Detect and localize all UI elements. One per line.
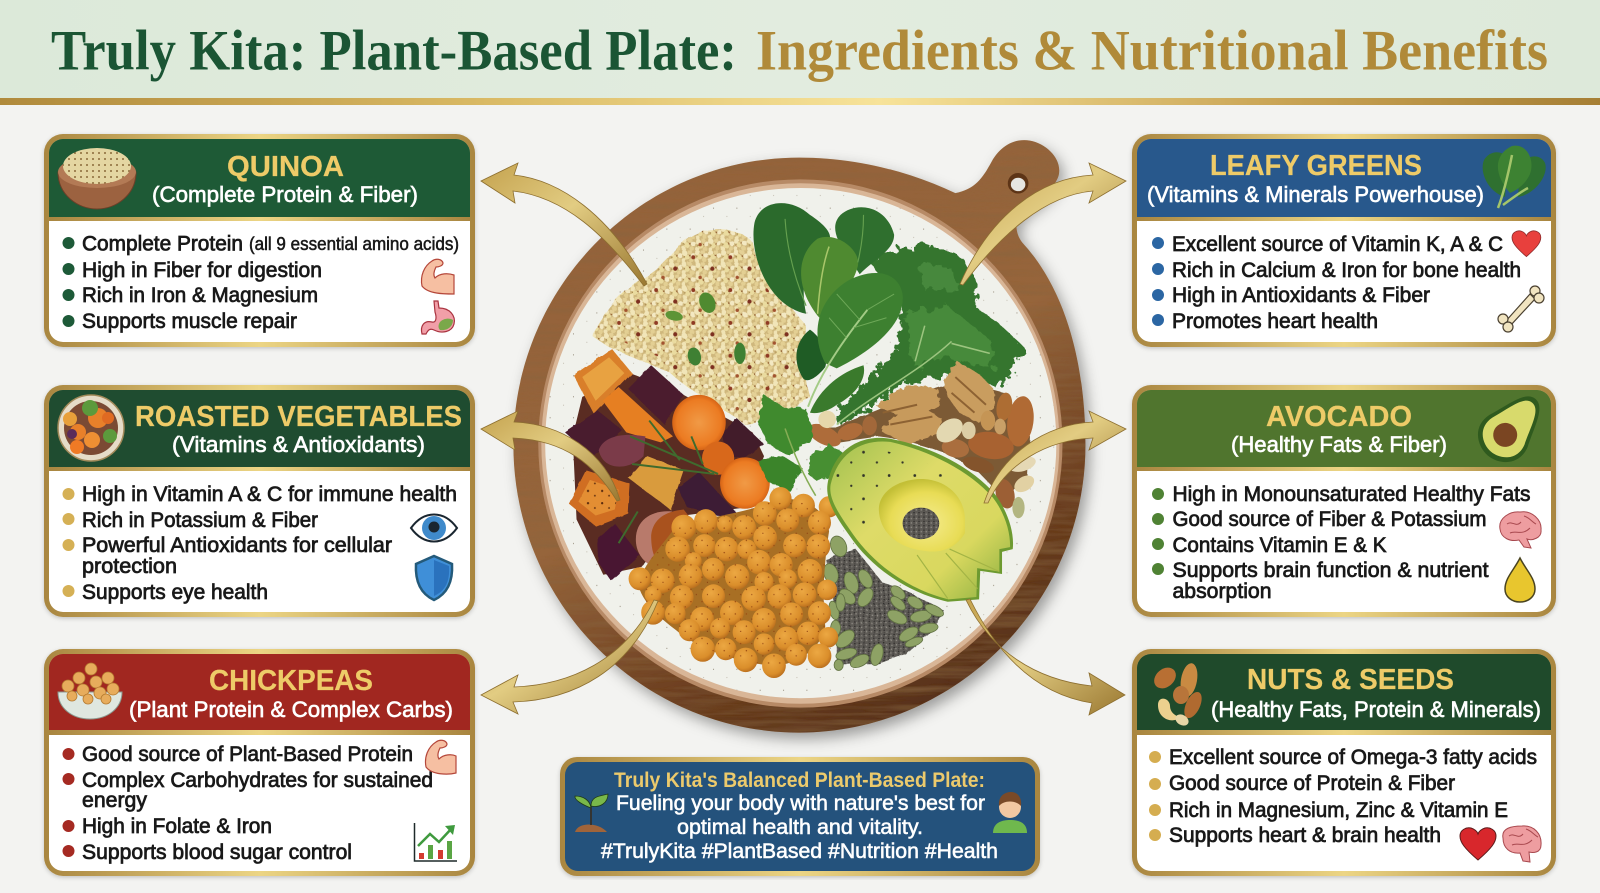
- plate illustration: [513, 140, 1085, 733]
- heading: avocado: AVOCADO: [1266, 401, 1412, 433]
- icon: avocado half: [1468, 382, 1556, 472]
- bullet list: leafy greens: Promotes heart health: [1172, 310, 1378, 333]
- arrow: nuts and seeds: [966, 599, 1125, 715]
- panel: avocado: [1132, 382, 1556, 617]
- banner text: optimal health and vitality.: [677, 816, 923, 839]
- panel: quinoa: [44, 134, 475, 347]
- icon: brain: [1503, 826, 1541, 862]
- bullet list: leafy greens: High in Antioxidants & Fiber: [1172, 284, 1430, 307]
- callout banner: [560, 757, 1040, 876]
- arrow: roasted vegetables: [481, 411, 620, 501]
- bullet list: avocado: [1152, 483, 1530, 603]
- subheading: chickpeas: (Plant Protein & Complex Carbs): [129, 697, 453, 722]
- bullet list: chickpeas: [62, 743, 433, 864]
- bullet list: quinoa: Supports muscle repair: [82, 310, 297, 333]
- icon: heart: [1460, 828, 1496, 860]
- panel: nuts and seeds: [1132, 649, 1556, 876]
- arrow: quinoa: [481, 163, 647, 286]
- arrow: chickpeas: [481, 600, 658, 714]
- bullet list: roasted vegetables: Rich in Potassium & Fiber: [82, 509, 318, 532]
- icon: bone: [1498, 286, 1544, 332]
- bullet list: quinoa: Complete Protein: [82, 232, 243, 256]
- panel: leafy greens: [1132, 134, 1556, 347]
- banner text: [601, 792, 998, 863]
- subheading: avocado: (Healthy Fats & Fiber): [1231, 432, 1447, 457]
- icon: stomach: [421, 301, 454, 334]
- panel: chickpeas: [44, 649, 475, 876]
- bullet list: roasted vegetables: Supports eye health: [82, 581, 268, 604]
- icon: muscle: [421, 259, 454, 294]
- wooden board with handle: [513, 140, 1085, 733]
- chia and pumpkin seeds: [821, 533, 945, 671]
- subheading: quinoa: (Complete Protein & Fiber): [152, 182, 418, 207]
- icon: growth chart: [414, 823, 457, 861]
- icon: person: [993, 792, 1027, 833]
- bullet list: chickpeas: energy: [82, 789, 147, 812]
- banner heading: Truly Kita's Balanced Plant-Based Plate:: [614, 769, 985, 792]
- bullet list: nuts and seeds: Good source of Protein & Fiber: [1169, 772, 1455, 795]
- bullet list: avocado: High in Monounsaturated Healthy Fats: [1172, 483, 1530, 506]
- bullet list: chickpeas: High in Folate & Iron: [82, 815, 272, 838]
- roasted vegetables: [565, 349, 770, 581]
- title: Truly Kita: Plant-Based Plate:: [51, 20, 737, 82]
- subheading: leafy greens: (Vitamins & Minerals Powerhouse): [1147, 182, 1484, 207]
- icon: muscle: [425, 740, 456, 774]
- bullet list: leafy greens: Excellent source of Vitamin K, A & C: [1172, 233, 1503, 256]
- bullet list: avocado: Supports brain function & nutrient: [1172, 559, 1489, 582]
- bullet list: quinoa: (all 9 essential amino acids): [249, 234, 459, 254]
- icon: sprout: [575, 794, 608, 832]
- subheading: nuts and seeds: (Healthy Fats, Protein & Minerals): [1211, 697, 1541, 722]
- icon: nuts: [1150, 662, 1205, 728]
- bullet list: chickpeas: Complex Carbohydrates for sustained: [82, 769, 433, 792]
- bullet list: leafy greens: [1152, 233, 1521, 333]
- icon: heart: [1512, 231, 1541, 257]
- banner text: Fueling your body with nature's best for: [616, 792, 985, 815]
- heading: leafy greens: LEAFY GREENS: [1210, 150, 1422, 182]
- icon: spinach: [1483, 146, 1546, 208]
- title: [51, 20, 1548, 82]
- bullet list: avocado: Good source of Fiber & Potassium: [1172, 508, 1486, 531]
- arrow: avocado: [984, 411, 1126, 503]
- icon: shield: [416, 556, 452, 600]
- bullet list: leafy greens: Rich in Calcium & Iron for bone health: [1172, 259, 1521, 282]
- icon: oil drop: [1505, 558, 1535, 602]
- walnuts, almonds and nuts: [805, 361, 1037, 518]
- icon: eye: [411, 514, 457, 542]
- bullet list: nuts and seeds: Supports heart & brain health: [1169, 824, 1441, 847]
- heading: roasted vegetables: ROASTED VEGETABLES: [135, 401, 462, 433]
- subheading: roasted vegetables: (Vitamins & Antioxidants): [172, 432, 425, 457]
- heading: chickpeas: CHICKPEAS: [209, 665, 373, 697]
- banner text: #TrulyKita #PlantBased #Nutrition #Health: [601, 840, 998, 863]
- bullet list: roasted vegetables: Powerful Antioxidants for cellular: [82, 534, 392, 557]
- icon: quinoa bowl: [58, 148, 136, 209]
- bullet list: nuts and seeds: Rich in Magnesium, Zinc & Vitamin E: [1169, 799, 1508, 822]
- icon: chickpea bowl: [58, 663, 122, 719]
- bullet list: avocado: absorption: [1172, 580, 1272, 603]
- avocado: [827, 438, 1013, 602]
- bullet list: avocado: Contains Vitamin E & K: [1172, 534, 1386, 557]
- header band: [0, 0, 1600, 105]
- plate surface: [545, 188, 1056, 698]
- spinach leaves: [753, 203, 903, 413]
- quinoa: [592, 229, 810, 425]
- bullet list: roasted vegetables: High in Vitamin A & C for immune health: [82, 483, 457, 506]
- heading: quinoa: QUINOA: [227, 151, 344, 183]
- bullet list: nuts and seeds: Excellent source of Omega-3 fatty acids: [1169, 746, 1537, 769]
- heading: nuts and seeds: NUTS & SEEDS: [1247, 664, 1454, 696]
- plate rim: [538, 179, 1062, 708]
- arrow: leafy greens: [960, 163, 1126, 285]
- bullet list: quinoa: High in Fiber for digestion: [82, 259, 322, 282]
- bullet list: chickpeas: Good source of Plant-Based Protein: [82, 743, 413, 766]
- icon: roasted vegetables plate: [58, 395, 124, 461]
- parsley garnish: [757, 395, 842, 496]
- bullet list: quinoa: Rich in Iron & Magnesium: [82, 284, 318, 307]
- bullet list: roasted vegetables: protection: [82, 555, 177, 578]
- title: Ingredients & Nutritional Benefits: [756, 20, 1548, 82]
- kale: [835, 243, 1022, 426]
- panel: roasted vegetables: [44, 385, 475, 617]
- bullet list: chickpeas: Supports blood sugar control: [82, 841, 352, 864]
- chickpeas: [629, 487, 839, 678]
- bullet list: quinoa: [62, 232, 459, 333]
- icon: brain: [1500, 512, 1541, 548]
- bullet list: roasted vegetables: [62, 483, 457, 604]
- bullet list: nuts and seeds: [1149, 746, 1537, 847]
